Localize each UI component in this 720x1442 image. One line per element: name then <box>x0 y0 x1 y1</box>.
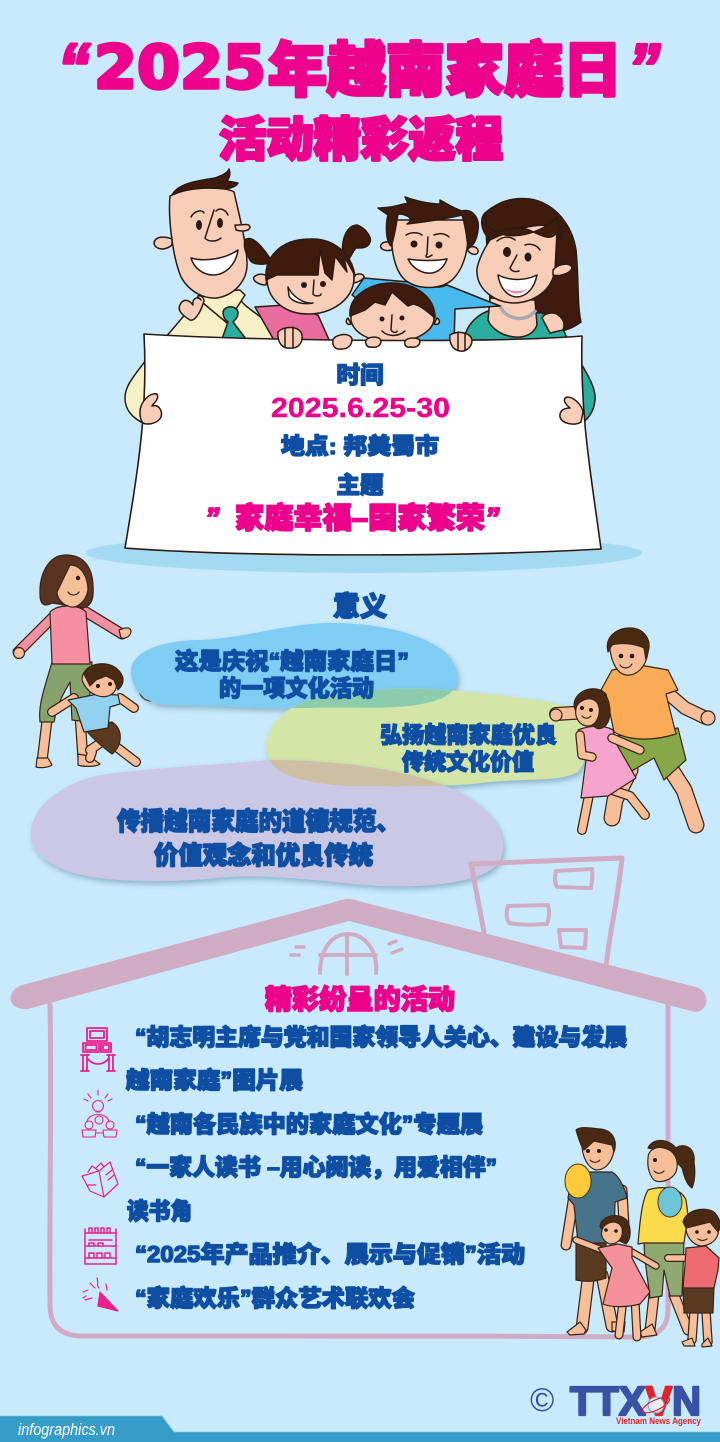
overlap: green and purple <box>270 760 444 786</box>
item 2: “越南各民族中的家庭文化”专题展 <box>135 1111 483 1137</box>
title line 2: 活动精彩返程 <box>219 113 503 166</box>
mother <box>14 555 131 768</box>
blob text: purple <box>117 807 400 870</box>
chimney <box>471 858 622 968</box>
daughter <box>576 1216 656 1337</box>
item 3: “一家人读书 –用心阅读，用爱相伴” <box>135 1154 497 1180</box>
banner text: date: 2025.6.25-30 <box>271 392 450 423</box>
mother <box>464 198 581 342</box>
ground shadow under banner <box>86 533 642 573</box>
heading: activities: 精彩纷呈的活动 <box>265 984 455 1015</box>
item 4: “2025年产品推介、展示与促销”活动 <box>135 1241 525 1267</box>
overlap: blue and green <box>292 688 452 708</box>
illustration: family behind banner <box>154 169 581 345</box>
blob text: purple: 价值观念和优良传统 <box>154 841 373 870</box>
title line 1: “ <box>58 30 90 104</box>
father <box>154 169 282 342</box>
attic window <box>291 934 402 974</box>
banner text: theme label: 主题 <box>336 472 384 498</box>
youngest child <box>346 283 439 342</box>
house outline <box>11 858 706 1337</box>
icon: lightbulb discussion <box>82 1090 117 1137</box>
roof <box>11 899 706 1012</box>
logo tagline: Vietnam News Agency <box>616 1416 702 1427</box>
icon: store shelf <box>85 1228 116 1264</box>
mother <box>638 1140 695 1337</box>
banner text: location: 地点: 邦美蜀市 <box>281 433 439 459</box>
blob text: purple: 传播越南家庭的道德规范、 <box>117 807 400 836</box>
son <box>668 1209 720 1347</box>
balloon: yellow <box>565 1164 591 1198</box>
item 3: 读书角 <box>127 1198 192 1224</box>
hands holding banner <box>140 327 583 424</box>
footer label: infographics.vn <box>18 1420 115 1439</box>
banner text: theme: ” <box>205 503 220 535</box>
blob text: blue: 的一项文化活动 <box>219 675 374 701</box>
white banner <box>125 334 601 555</box>
sleeves behind banner <box>125 360 595 426</box>
blob text: blue <box>175 648 409 701</box>
blob: blue <box>131 623 458 708</box>
heading: significance: 意义 <box>333 591 387 622</box>
figure: family with balloons <box>565 1128 720 1347</box>
panel: meaning blobs <box>31 623 587 886</box>
walls <box>50 1005 668 1337</box>
older son <box>352 197 500 345</box>
copyright symbol: © <box>530 1381 554 1418</box>
blob: purple <box>31 760 503 886</box>
footer bar <box>0 1416 720 1442</box>
item 1: 越南家庭”图片展 <box>126 1067 303 1093</box>
title line 1: 2025 <box>94 33 266 103</box>
activity list <box>126 1024 627 1311</box>
banner text: time label: 时间 <box>336 362 384 388</box>
banner text: theme: 家庭幸福–国家繁荣 <box>235 501 485 535</box>
icon: party hat <box>83 1278 118 1311</box>
title line 1 <box>58 30 660 104</box>
title line 1: 年越南家庭日 <box>268 38 622 104</box>
item 5: “家庭欢乐”群众艺术联欢会 <box>135 1285 415 1311</box>
logo: TTXVN: TTXVN <box>570 1378 701 1424</box>
blob text: green: 弘扬越南家庭优良 <box>380 722 557 748</box>
item 1 <box>126 1024 627 1093</box>
father <box>565 1128 627 1335</box>
title line 1: ” <box>628 30 660 104</box>
figure: mother and son with ball <box>14 555 163 768</box>
blob text: blue: 这是庆祝“越南家庭日” <box>175 648 409 674</box>
daughter <box>574 689 645 830</box>
banner text: theme: ” <box>485 503 500 535</box>
blob: green <box>266 689 587 786</box>
logo globe <box>640 1394 672 1416</box>
blob text: green: 传统文化价值 <box>402 749 534 775</box>
item 3 <box>127 1154 497 1224</box>
icon: photo gallery <box>81 1028 115 1071</box>
blob text: green <box>380 722 557 775</box>
figure: father and daughter running <box>550 628 715 830</box>
icon: open book <box>82 1162 118 1197</box>
father <box>550 628 715 825</box>
daughter <box>244 225 370 342</box>
soccer ball <box>139 677 163 701</box>
item 1: “胡志明主席与党和国家领导人关心、建设与发展 <box>135 1024 627 1050</box>
balloon: teal <box>658 1187 682 1217</box>
son <box>52 664 136 762</box>
